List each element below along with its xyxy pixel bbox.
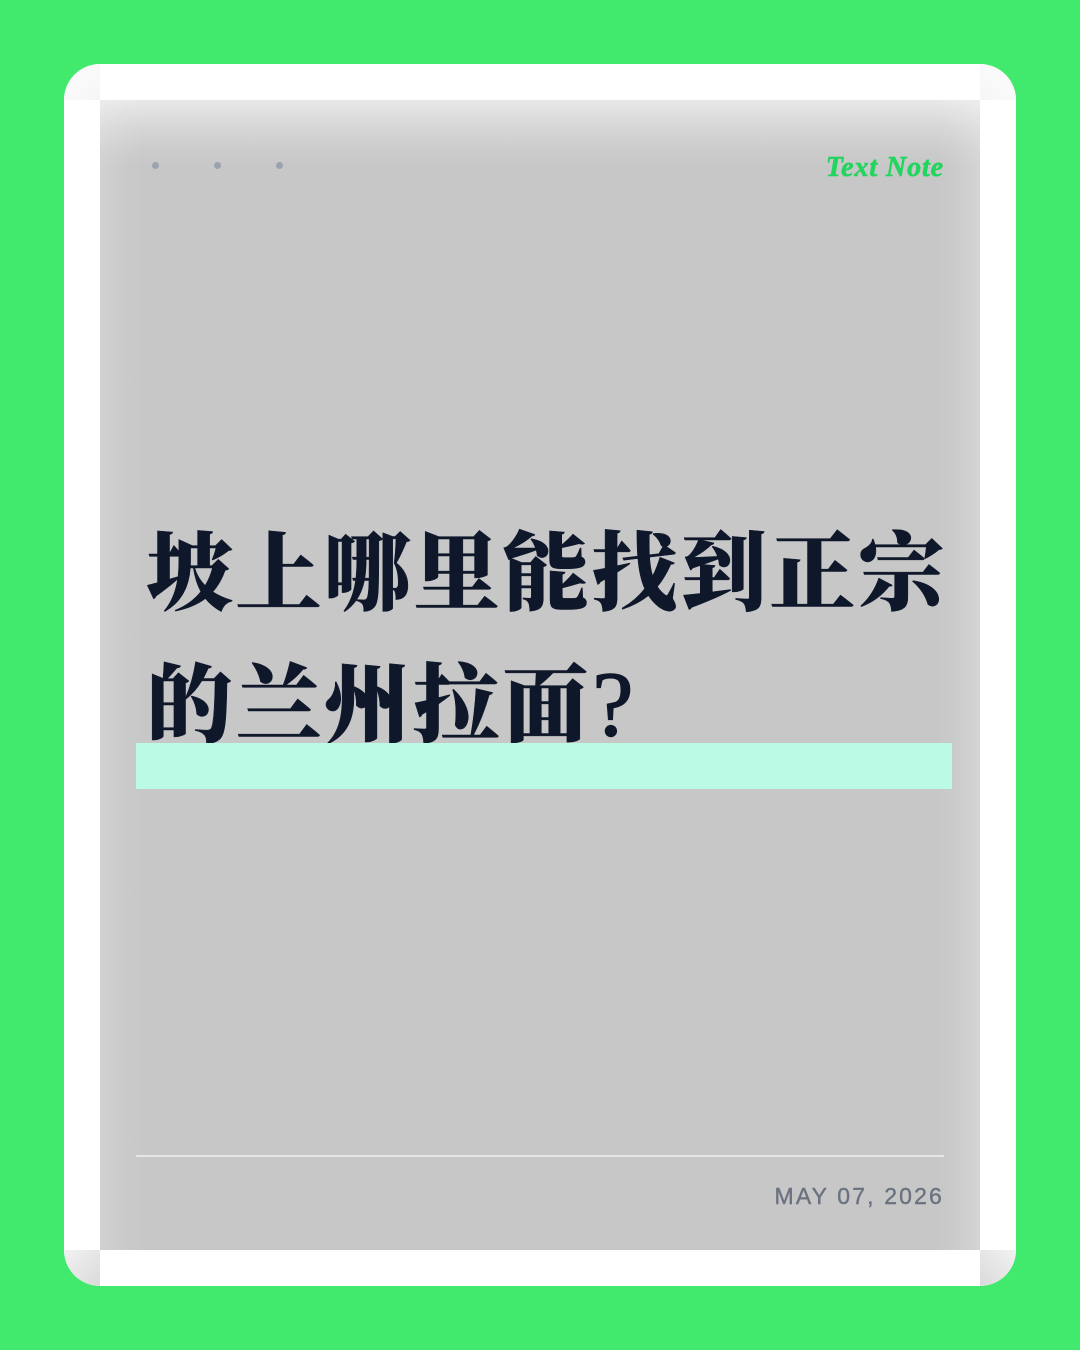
footer divider (136, 1155, 944, 1157)
label: Text Note: Text Note (826, 152, 944, 183)
date: MAY 07, 2026 (775, 1183, 944, 1209)
title: 的兰州拉面? (146, 636, 633, 760)
title (146, 504, 948, 760)
card: white rounded frame (64, 64, 1016, 1286)
decorative dots (152, 162, 283, 169)
highlight bar (136, 743, 952, 789)
panel: grey content area (100, 100, 980, 1250)
title: 坡上哪里能找到正宗 (146, 504, 948, 628)
